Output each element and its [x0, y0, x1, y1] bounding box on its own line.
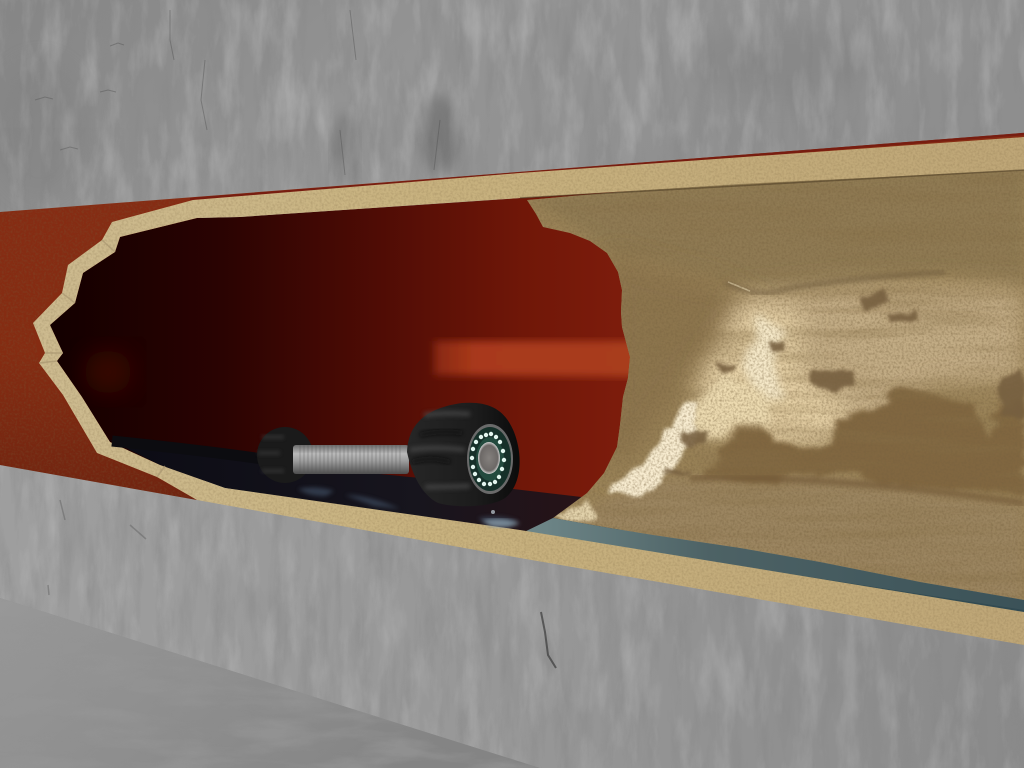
- pipe floor dark water: [110, 440, 640, 552]
- streak texture: [689, 288, 1017, 536]
- pipe interior: [50, 190, 700, 540]
- lower band: [580, 487, 1016, 594]
- water glints: [482, 510, 520, 528]
- throat shadow: [614, 264, 729, 456]
- pipe exterior red coating: [0, 133, 1024, 505]
- sediment dark patches: [665, 292, 1024, 475]
- fine grain: [520, 160, 1024, 610]
- upper band: [536, 172, 1020, 284]
- lower brown band: [700, 385, 1024, 498]
- cable: [112, 441, 262, 459]
- bright glow: [695, 305, 850, 445]
- camera face: [467, 424, 513, 494]
- lower transition line: [690, 478, 1024, 503]
- lens: [478, 442, 500, 474]
- pipe cut edge: beige wall section: [30, 130, 1024, 650]
- inspection camera: [112, 403, 520, 528]
- threaded rod: [293, 445, 409, 474]
- light mid band: [700, 285, 1024, 440]
- LED ring: [470, 432, 506, 486]
- concrete floor: [0, 598, 540, 768]
- head ribs: [410, 413, 470, 487]
- ridge line: [725, 272, 945, 293]
- upper concrete wall: [0, 0, 1024, 215]
- lower concrete wall: [0, 460, 1024, 768]
- water stream: [520, 518, 1024, 616]
- interior highlight: [434, 341, 640, 377]
- sand highlights: [556, 318, 785, 522]
- rear knob: [257, 427, 313, 483]
- front head: [407, 403, 520, 506]
- faint glow: [84, 350, 132, 394]
- sediment deposit: [520, 160, 1024, 610]
